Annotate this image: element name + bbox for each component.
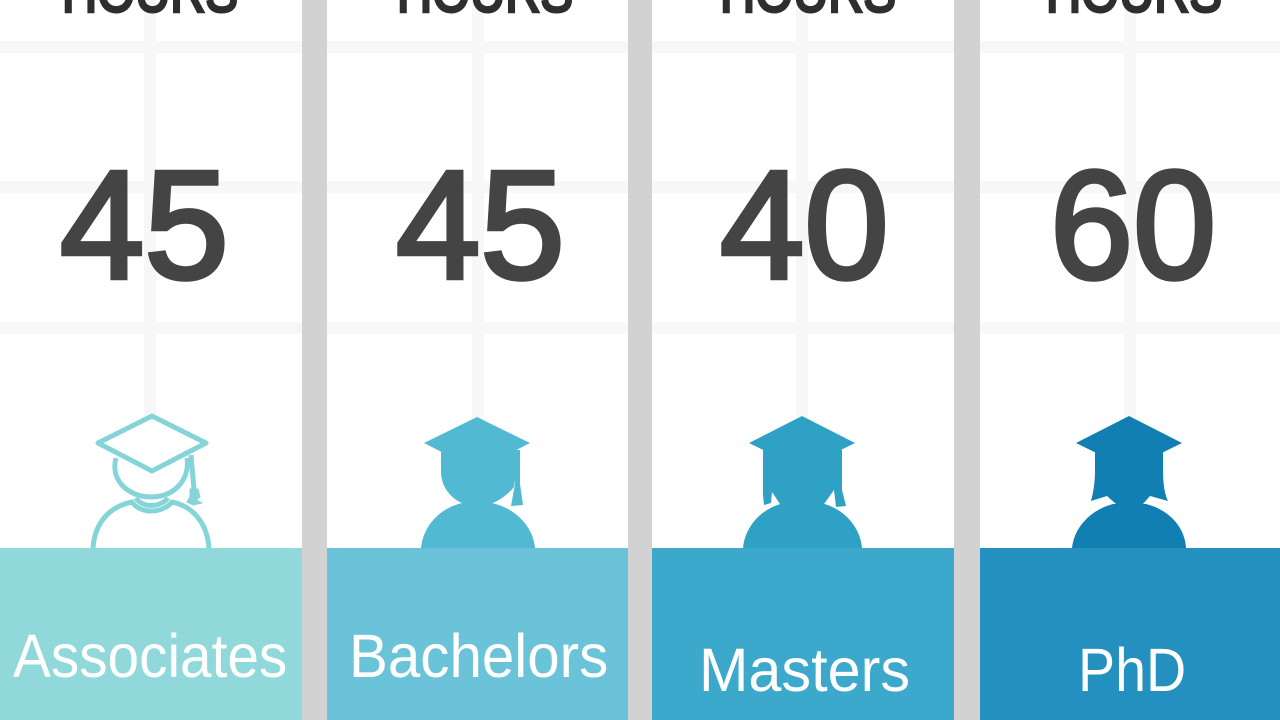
icon: masters graduate xyxy=(743,416,862,548)
icon: associates graduate outline xyxy=(93,416,209,548)
panel: bachelors label xyxy=(327,548,628,720)
panel: masters label: Masters xyxy=(699,636,910,704)
column heading: hours, cropped at top xyxy=(62,0,1222,24)
panel: associates label: Associates xyxy=(13,623,287,690)
panel: associates label xyxy=(0,548,302,720)
hours values xyxy=(60,140,1216,311)
icon: phd graduate xyxy=(1072,416,1186,548)
hours values: 40 xyxy=(720,140,889,311)
column dividers xyxy=(302,0,980,720)
hours values: 45 xyxy=(396,140,565,311)
panel: phd label: PhD xyxy=(1078,637,1186,705)
hours values: 60 xyxy=(1050,140,1216,311)
icon: bachelors graduate xyxy=(421,417,535,548)
hours values: 45 xyxy=(60,140,229,311)
panel: masters label xyxy=(652,548,954,720)
panel: phd label xyxy=(980,548,1280,720)
panel: bachelors label: Bachelors xyxy=(349,622,608,690)
